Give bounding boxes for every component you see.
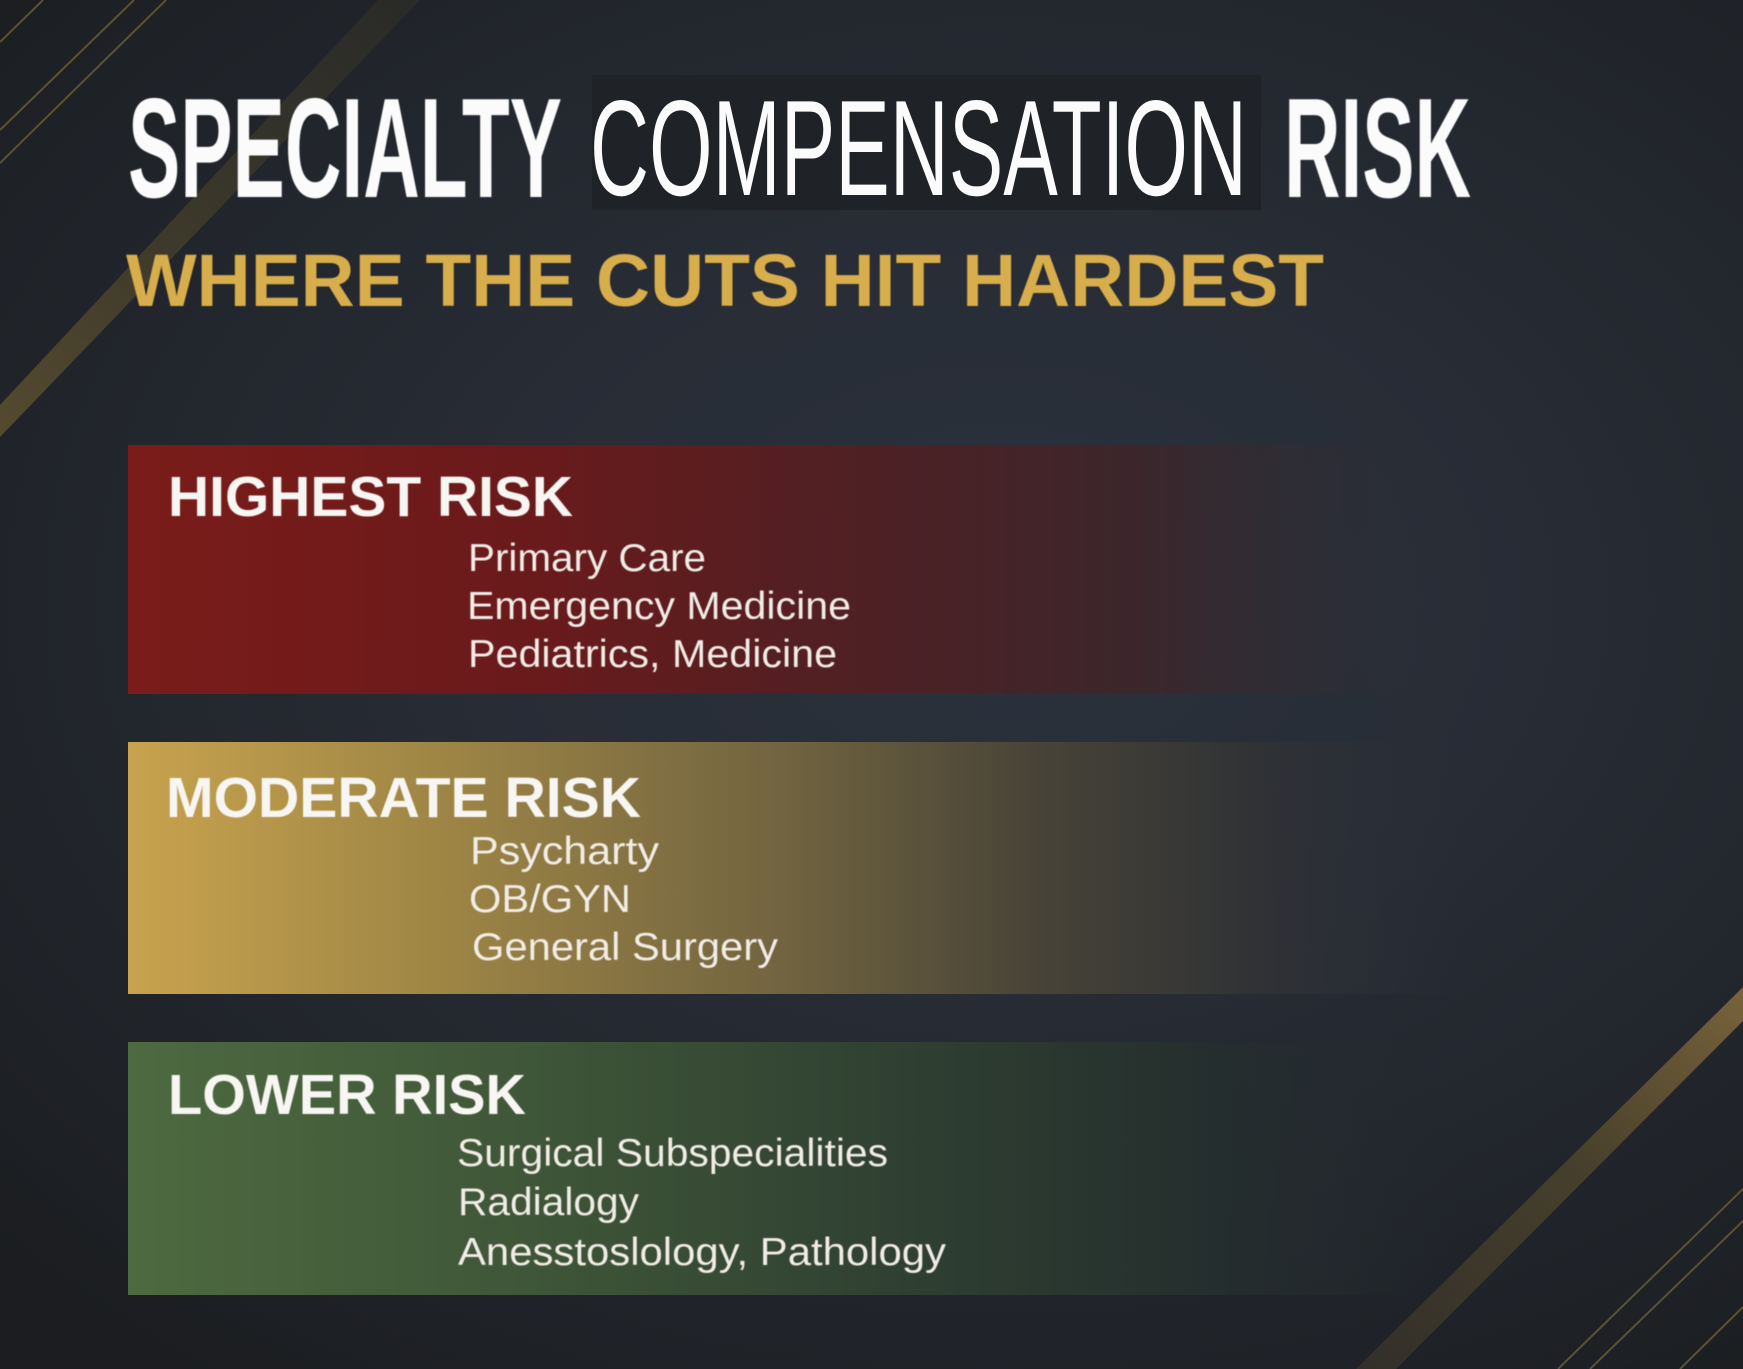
panel: highest risk [128, 445, 1468, 694]
list: lower risk specialties: Surgical Subspecialities [457, 1132, 888, 1175]
list: moderate risk specialties: General Surgery [472, 926, 779, 969]
panel: lower risk [128, 1042, 1468, 1295]
list: highest risk specialties: Pediatrics, Medicine [468, 633, 837, 676]
list: lower risk specialties [457, 1132, 947, 1274]
list: moderate risk specialties: Psycharty [470, 830, 660, 873]
list: lower risk specialties: Anesstoslology, Pathology [458, 1231, 947, 1274]
heading: lower risk: LOWER RISK [168, 1063, 526, 1127]
list: moderate risk specialties [469, 830, 779, 969]
panel: moderate risk [128, 742, 1468, 994]
list: moderate risk specialties: OB/GYN [469, 878, 631, 921]
list: highest risk specialties [467, 537, 851, 676]
title: SPECIALTY [128, 69, 562, 228]
title [128, 69, 1471, 228]
title: RISK [1284, 69, 1471, 228]
list: lower risk specialties: Radialogy [458, 1181, 640, 1224]
subtitle: WHERE THE CUTS HIT HARDEST [126, 239, 1324, 322]
heading: highest risk: HIGHEST RISK [168, 465, 573, 529]
list: highest risk specialties: Primary Care [468, 537, 706, 580]
title: COMPENSATION [590, 72, 1247, 224]
list: highest risk specialties: Emergency Medicine [467, 585, 851, 628]
heading: moderate risk: MODERATE RISK [166, 766, 641, 830]
